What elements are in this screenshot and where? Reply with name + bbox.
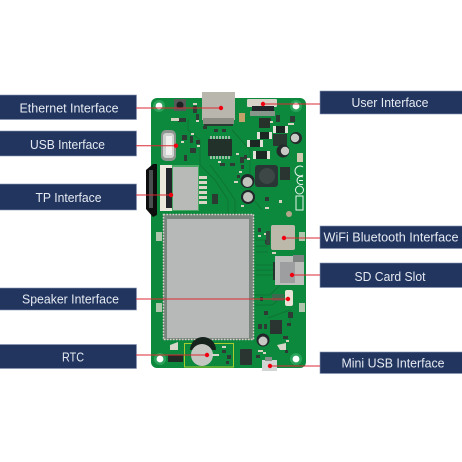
callout: WiFi Bluetooth Interface: WiFi Bluetooth Interface — [324, 230, 458, 244]
mini USB port — [262, 357, 277, 371]
callout: Ethernet Interface — [0, 95, 223, 120]
TP connector — [146, 164, 218, 217]
RTC coin cell — [184, 337, 234, 367]
lower components — [156, 232, 305, 365]
callout: Mini USB Interface: Mini USB Interface — [342, 356, 444, 370]
callout: SD Card Slot — [290, 263, 462, 288]
callout: RTC: RTC — [62, 350, 84, 364]
callout: TP Interface: TP Interface — [36, 190, 102, 205]
callout: TP Interface — [0, 184, 173, 210]
callout: SD Card Slot: SD Card Slot — [354, 269, 426, 284]
callout: User Interface — [261, 91, 462, 114]
callout: USB Interface — [0, 131, 178, 156]
power components — [239, 113, 303, 180]
main chip — [208, 136, 232, 159]
mounting holes — [153, 100, 302, 365]
USB port — [161, 130, 176, 161]
small SMD components — [178, 106, 295, 364]
callout: Ethernet Interface: Ethernet Interface — [20, 100, 118, 116]
circuit board — [146, 92, 306, 371]
user FPC connector — [247, 99, 277, 116]
callout: User Interface: User Interface — [352, 95, 428, 110]
ethernet port — [202, 92, 235, 126]
callout: RTC — [0, 344, 209, 368]
capacitors — [240, 174, 255, 204]
callout: USB Interface: USB Interface — [30, 137, 105, 152]
speaker connector — [272, 290, 293, 306]
callout: Speaker Interface: Speaker Interface — [22, 292, 119, 306]
WiFi Bluetooth module — [266, 225, 295, 250]
callout: WiFi Bluetooth Interface — [282, 226, 462, 248]
callout: Speaker Interface — [0, 288, 290, 310]
callout: Mini USB Interface — [268, 352, 462, 374]
display controller shield — [163, 214, 254, 340]
board base — [151, 98, 306, 368]
reset button — [174, 99, 186, 111]
SD card slot — [273, 255, 304, 285]
certification marks — [295, 166, 304, 210]
inductor — [255, 165, 278, 187]
